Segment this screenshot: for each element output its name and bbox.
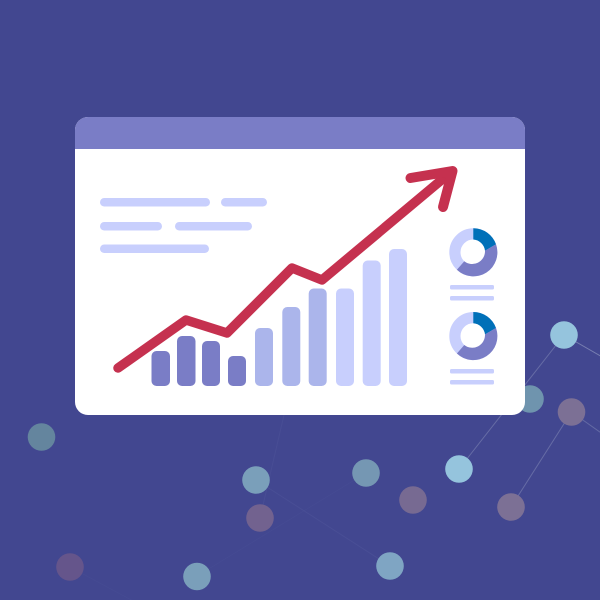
donut chart 1 <box>455 228 497 276</box>
legend lines 2 <box>450 369 494 384</box>
legend lines 1 <box>450 285 494 300</box>
window title bar <box>75 117 525 149</box>
trend arrow <box>118 171 452 368</box>
window body <box>75 117 525 415</box>
bar chart <box>152 249 407 386</box>
donut chart 2 <box>455 312 497 360</box>
network of connected dots <box>28 321 600 600</box>
text placeholder lines <box>100 198 267 253</box>
panel: browser window <box>75 117 525 415</box>
